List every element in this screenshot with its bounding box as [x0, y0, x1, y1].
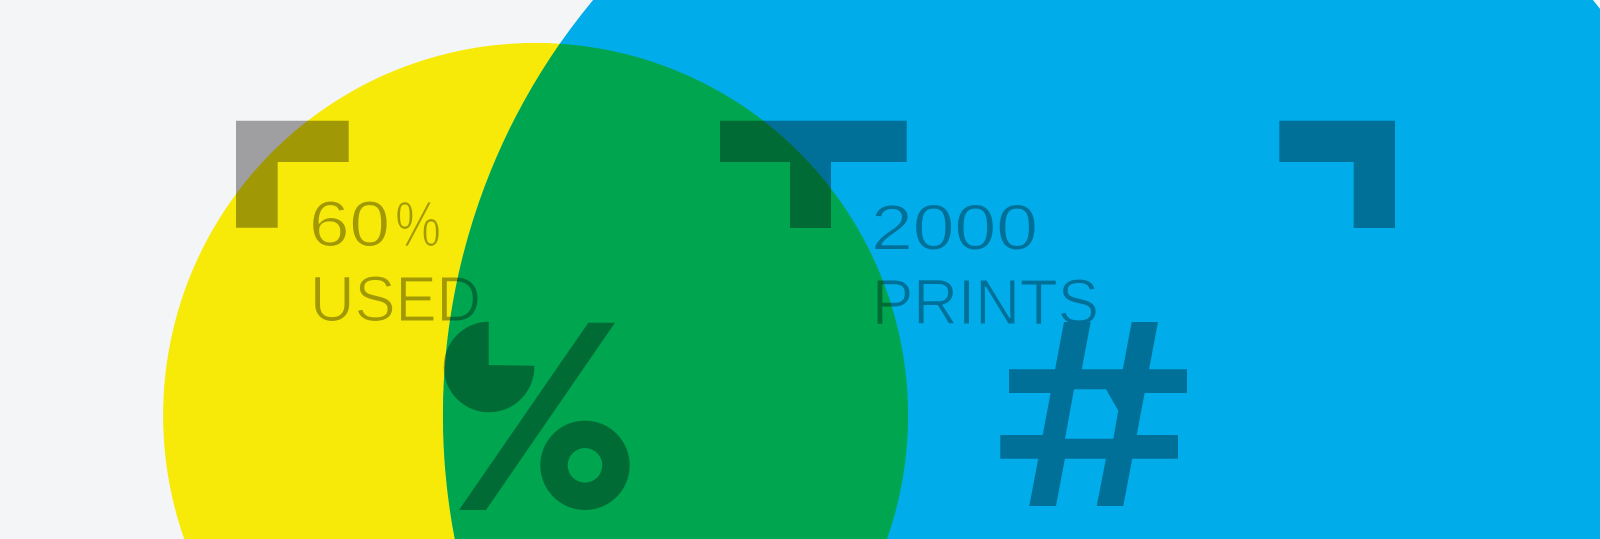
text: 2000 prints: [871, 192, 1099, 338]
text: 60% used: USED: [310, 263, 481, 335]
text: 2000 prints: PRINTS: [872, 266, 1099, 338]
yellow circle: [163, 43, 908, 539]
bracket: top-left corner: [236, 121, 349, 228]
text: 2000 prints: 2000: [871, 192, 1038, 264]
icon: percent symbol: [444, 322, 630, 510]
green overlap of circles: [443, 44, 908, 539]
text: 60% used: %: [395, 188, 441, 260]
bracket: centre T shape: [720, 121, 907, 228]
bracket: top-right corner: [1279, 121, 1395, 228]
blue circle: [443, 0, 1600, 539]
text: 60% used: [309, 188, 481, 335]
dark overlay group: brackets, labels and symbols: [236, 121, 1395, 510]
text: 60% used: 60: [309, 188, 390, 260]
icon: hash symbol: [1000, 322, 1187, 506]
